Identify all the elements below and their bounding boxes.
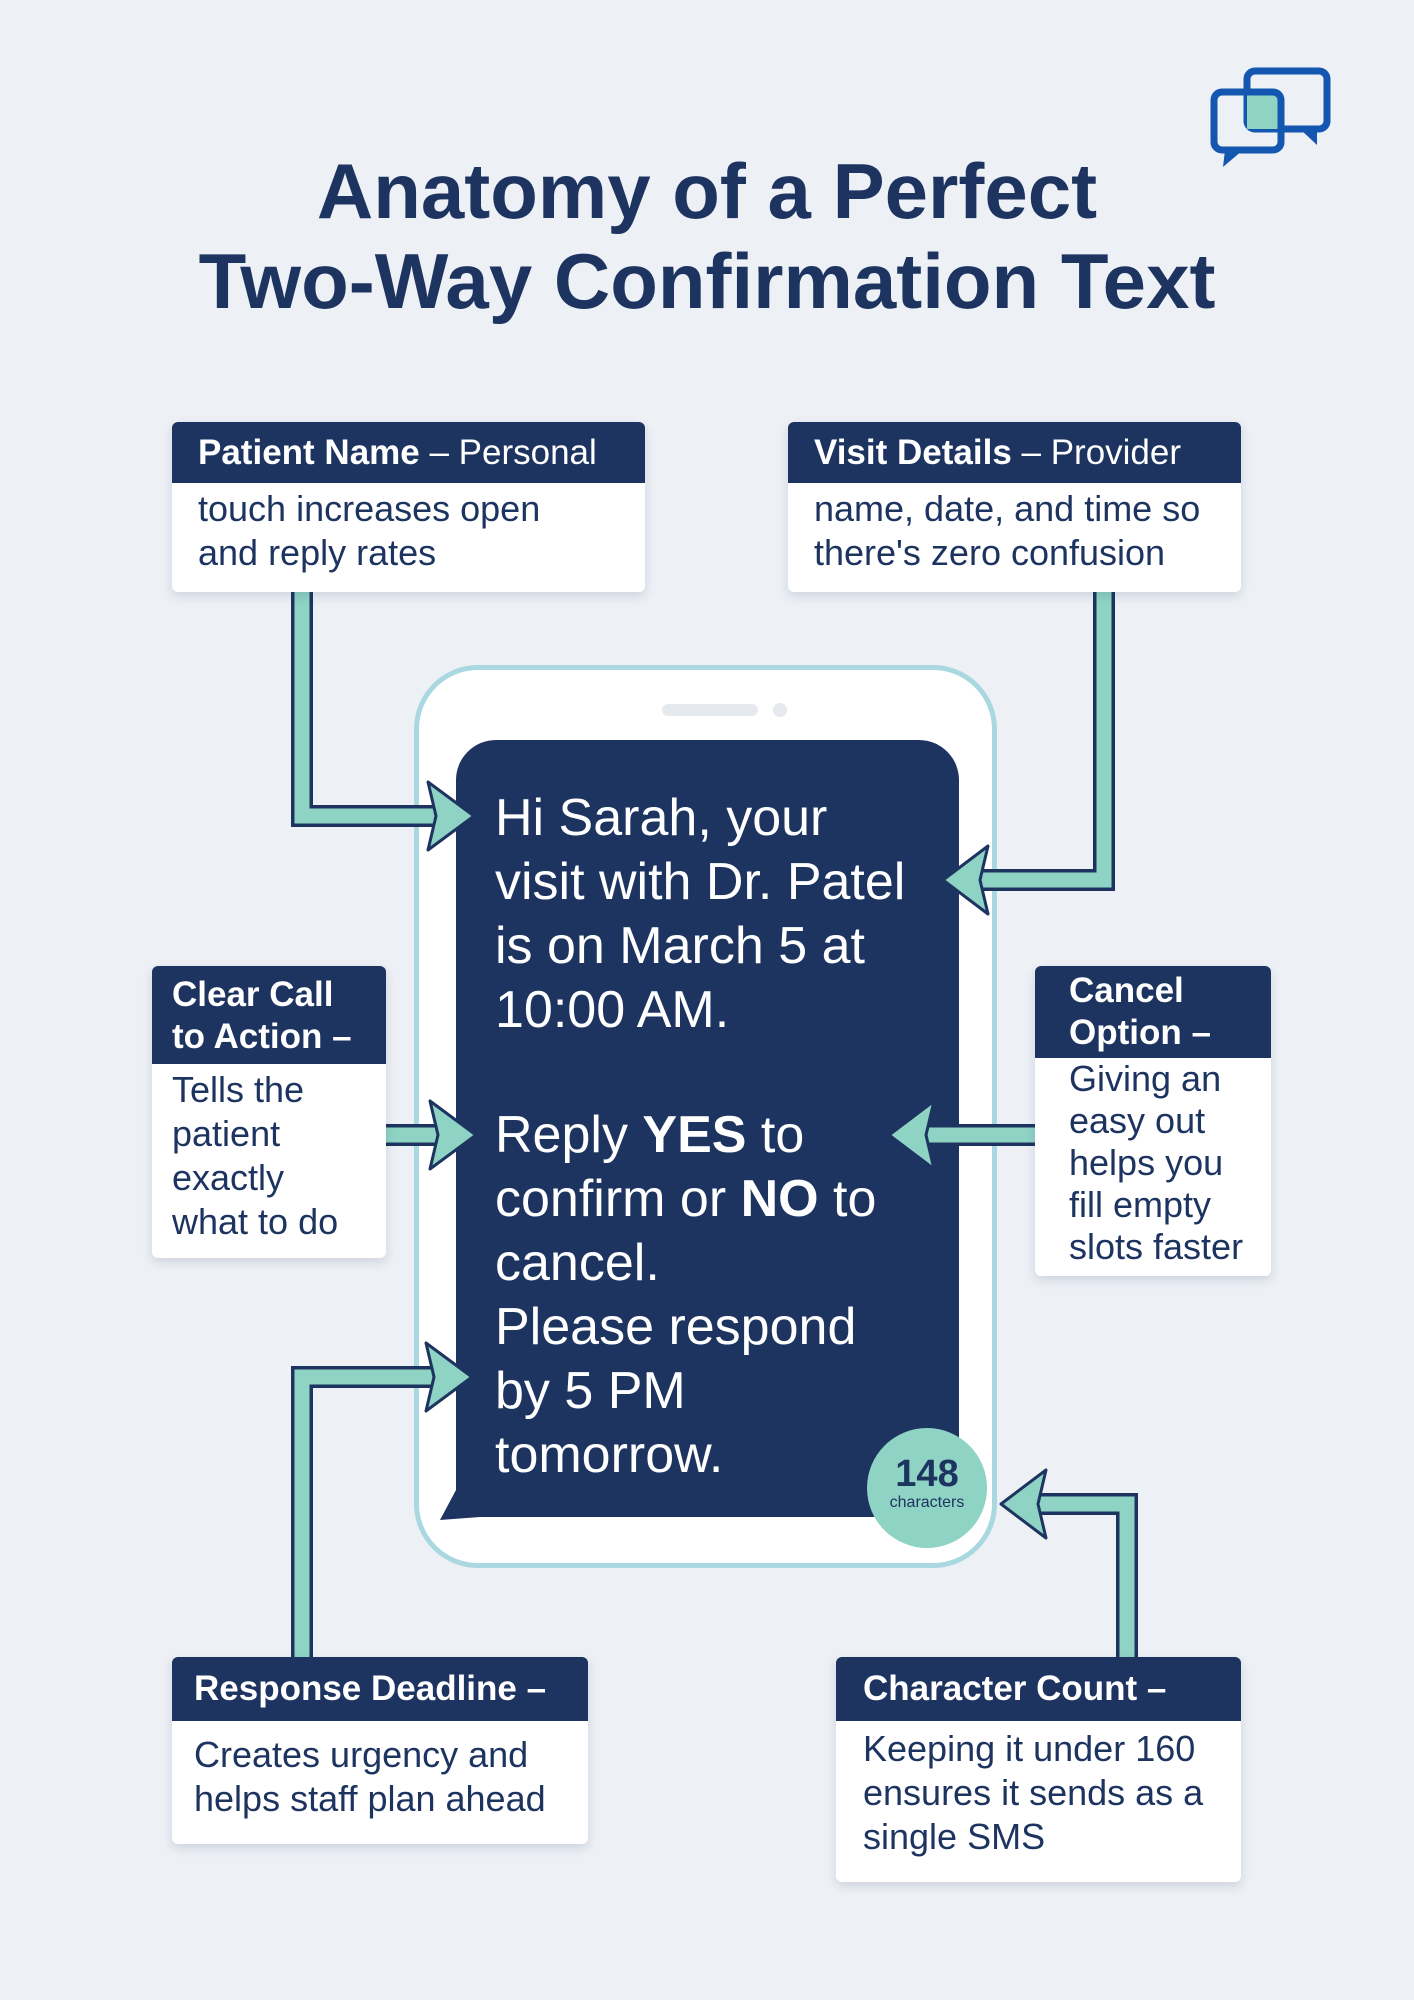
panel: cancel option: Giving an: [1069, 1058, 1221, 1099]
panel: response deadline: Response Deadline –: [194, 1669, 546, 1708]
panel: cancel option: [1035, 966, 1271, 1276]
panel: clear call to action: exactly: [172, 1157, 284, 1198]
panel: character count: single SMS: [863, 1816, 1045, 1857]
message bubble: cancel.: [495, 1234, 660, 1292]
panel: patient name: Patient Name – Personal: [198, 433, 597, 472]
icon: chat bubbles: [1210, 68, 1330, 167]
phone speaker: [662, 704, 758, 716]
panel: cancel option: helps you: [1069, 1142, 1223, 1183]
message bubble: by 5 PM: [495, 1362, 686, 1420]
panel: patient name: [172, 422, 645, 592]
panel: clear call to action: Tells the: [172, 1069, 304, 1110]
message bubble: tomorrow.: [495, 1426, 723, 1484]
badge: 148 characters: [867, 1428, 987, 1548]
panel: clear call to action: Clear Call: [172, 975, 333, 1014]
panel: response deadline: helps staff plan ahead: [194, 1778, 546, 1819]
badge: 148 characters: 148: [895, 1453, 959, 1495]
panel: cancel option: fill empty: [1069, 1184, 1211, 1225]
message bubble: Reply YES to: [495, 1106, 804, 1164]
message bubble: is on March 5 at: [495, 917, 865, 975]
title: Anatomy of a Perfect: [317, 147, 1097, 235]
panel: character count: [836, 1657, 1241, 1882]
message bubble: visit with Dr. Patel: [495, 853, 905, 911]
panel: visit details: Visit Details – Provider: [814, 433, 1181, 472]
panel: visit details: name, date, and time so: [814, 488, 1200, 529]
panel: cancel option: easy out: [1069, 1100, 1205, 1141]
bubble tail: [440, 1490, 480, 1520]
phone: [414, 665, 997, 1568]
message bubble: Please respond: [495, 1298, 856, 1356]
panel: clear call to action: what to do: [172, 1201, 338, 1242]
panel: clear call to action: to Action –: [172, 1017, 352, 1056]
panel: cancel option: Option –: [1069, 1013, 1211, 1052]
badge: 148 characters: characters: [890, 1494, 964, 1511]
message bubble: 10:00 AM.: [495, 981, 729, 1039]
panel: character count: Keeping it under 160: [863, 1728, 1195, 1769]
panel: cancel option: Cancel: [1069, 971, 1184, 1010]
message bubble: [456, 740, 959, 1517]
panel: character count: Character Count –: [863, 1669, 1166, 1708]
panel: visit details: [788, 422, 1241, 592]
title: Two-Way Confirmation Text: [199, 237, 1215, 325]
title: [199, 147, 1215, 325]
message bubble: Hi Sarah, your: [495, 789, 827, 847]
panel: response deadline: Creates urgency and: [194, 1734, 528, 1775]
panel: cancel option: slots faster: [1069, 1226, 1243, 1267]
panel: patient name: touch increases open: [198, 488, 540, 529]
message bubble: confirm or NO to: [495, 1170, 876, 1228]
panel: clear call to action: patient: [172, 1113, 280, 1154]
panel: clear call to action: [152, 966, 386, 1258]
panel: character count: ensures it sends as a: [863, 1772, 1203, 1813]
panel: response deadline: [172, 1657, 588, 1844]
panel: visit details: there's zero confusion: [814, 532, 1165, 573]
panel: patient name: and reply rates: [198, 532, 436, 573]
